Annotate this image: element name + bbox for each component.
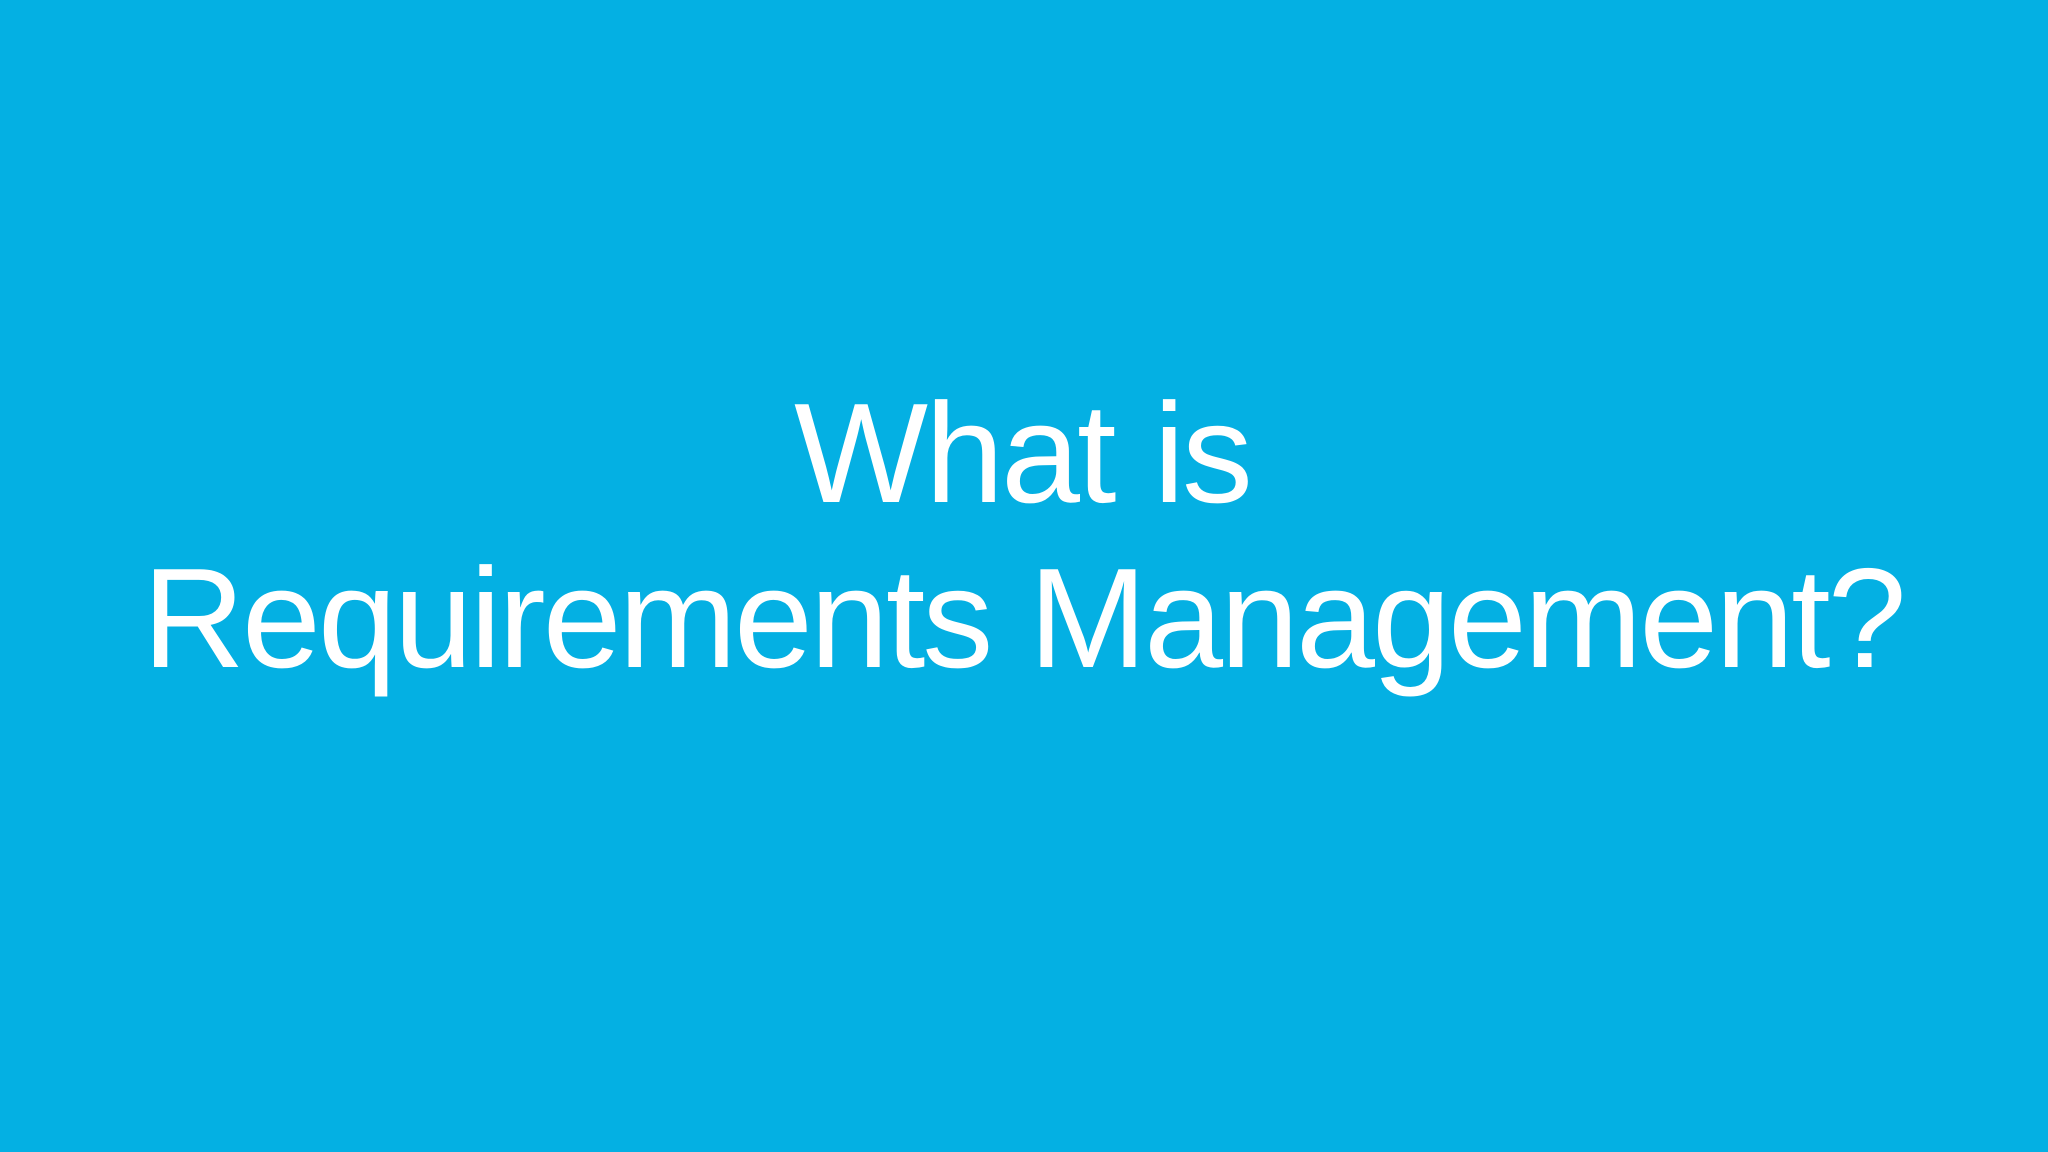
- title line: What is: What is: [794, 374, 1250, 533]
- title line: Requirements Management?: Requirements Management?: [142, 539, 1904, 698]
